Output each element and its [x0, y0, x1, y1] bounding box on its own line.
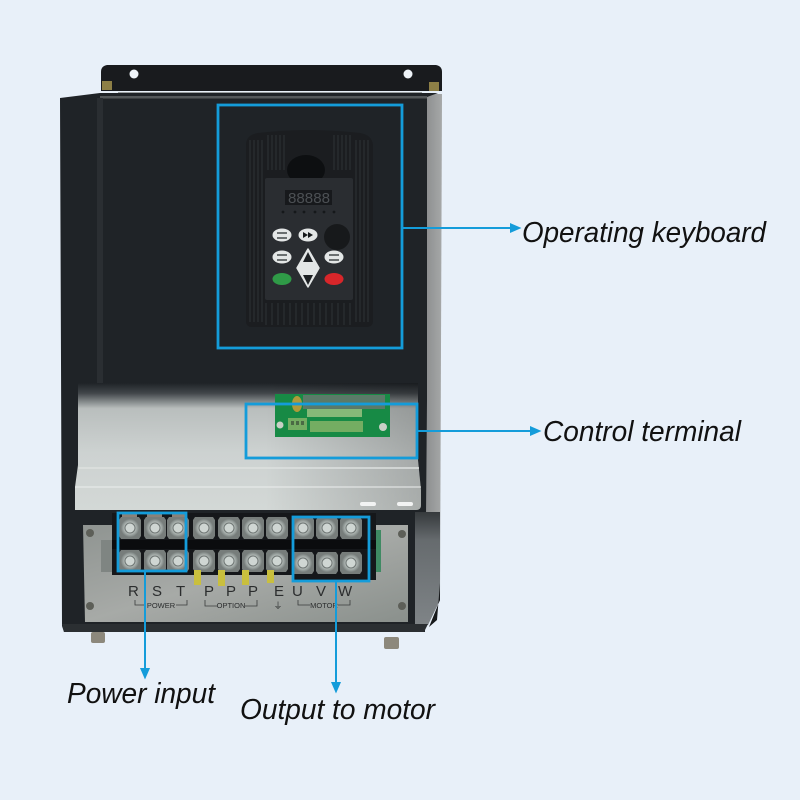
terminal labels: U — [292, 583, 303, 600]
label: operating keyboard: Operating keyboard — [522, 217, 767, 249]
terminal plate — [83, 525, 408, 622]
terminal labels: ⏚ — [273, 601, 283, 611]
highlight: operating keyboard — [218, 105, 402, 348]
side board pieces — [101, 530, 381, 572]
label: control terminal: Control terminal — [543, 416, 743, 448]
terminal labels: P — [248, 583, 258, 600]
highlight: control terminal — [246, 404, 417, 458]
knob — [324, 224, 350, 250]
bottom edge — [62, 624, 428, 632]
control board — [275, 394, 390, 437]
highlight: output to motor — [293, 517, 369, 581]
label: output to motor: Output to motor — [240, 694, 436, 726]
terminal labels: P — [226, 583, 236, 600]
side panel lower section — [415, 512, 440, 625]
display: 88888 — [288, 190, 330, 207]
terminal labels: E — [274, 583, 284, 600]
highlight: power input — [118, 513, 186, 571]
plate screws — [86, 529, 406, 610]
terminal labels: S — [152, 583, 162, 600]
terminal labels — [128, 583, 353, 611]
side panel — [425, 94, 442, 625]
arrow: power input — [142, 571, 148, 677]
inverter device — [60, 65, 442, 649]
front body — [60, 93, 438, 632]
terminal labels: R — [128, 583, 139, 600]
terminal labels: MOTOR — [310, 601, 338, 610]
mounting bracket — [101, 65, 442, 95]
arrow: operating keyboard — [402, 224, 519, 232]
arrow: control terminal — [417, 428, 539, 434]
terminal labels: T — [176, 583, 185, 600]
keys — [272, 228, 344, 287]
cover tray — [75, 383, 421, 510]
label: power input: Power input — [67, 678, 217, 710]
terminal block — [112, 513, 376, 586]
keypad bezel — [246, 130, 373, 327]
feet — [91, 632, 105, 643]
terminal labels: V — [316, 583, 326, 600]
terminal labels: W — [338, 583, 353, 600]
arrow: output to motor — [332, 581, 340, 691]
terminal labels: P — [204, 583, 214, 600]
keypad panel — [265, 178, 353, 300]
terminal labels: POWER — [147, 601, 176, 610]
terminal labels: OPTION — [217, 601, 245, 610]
